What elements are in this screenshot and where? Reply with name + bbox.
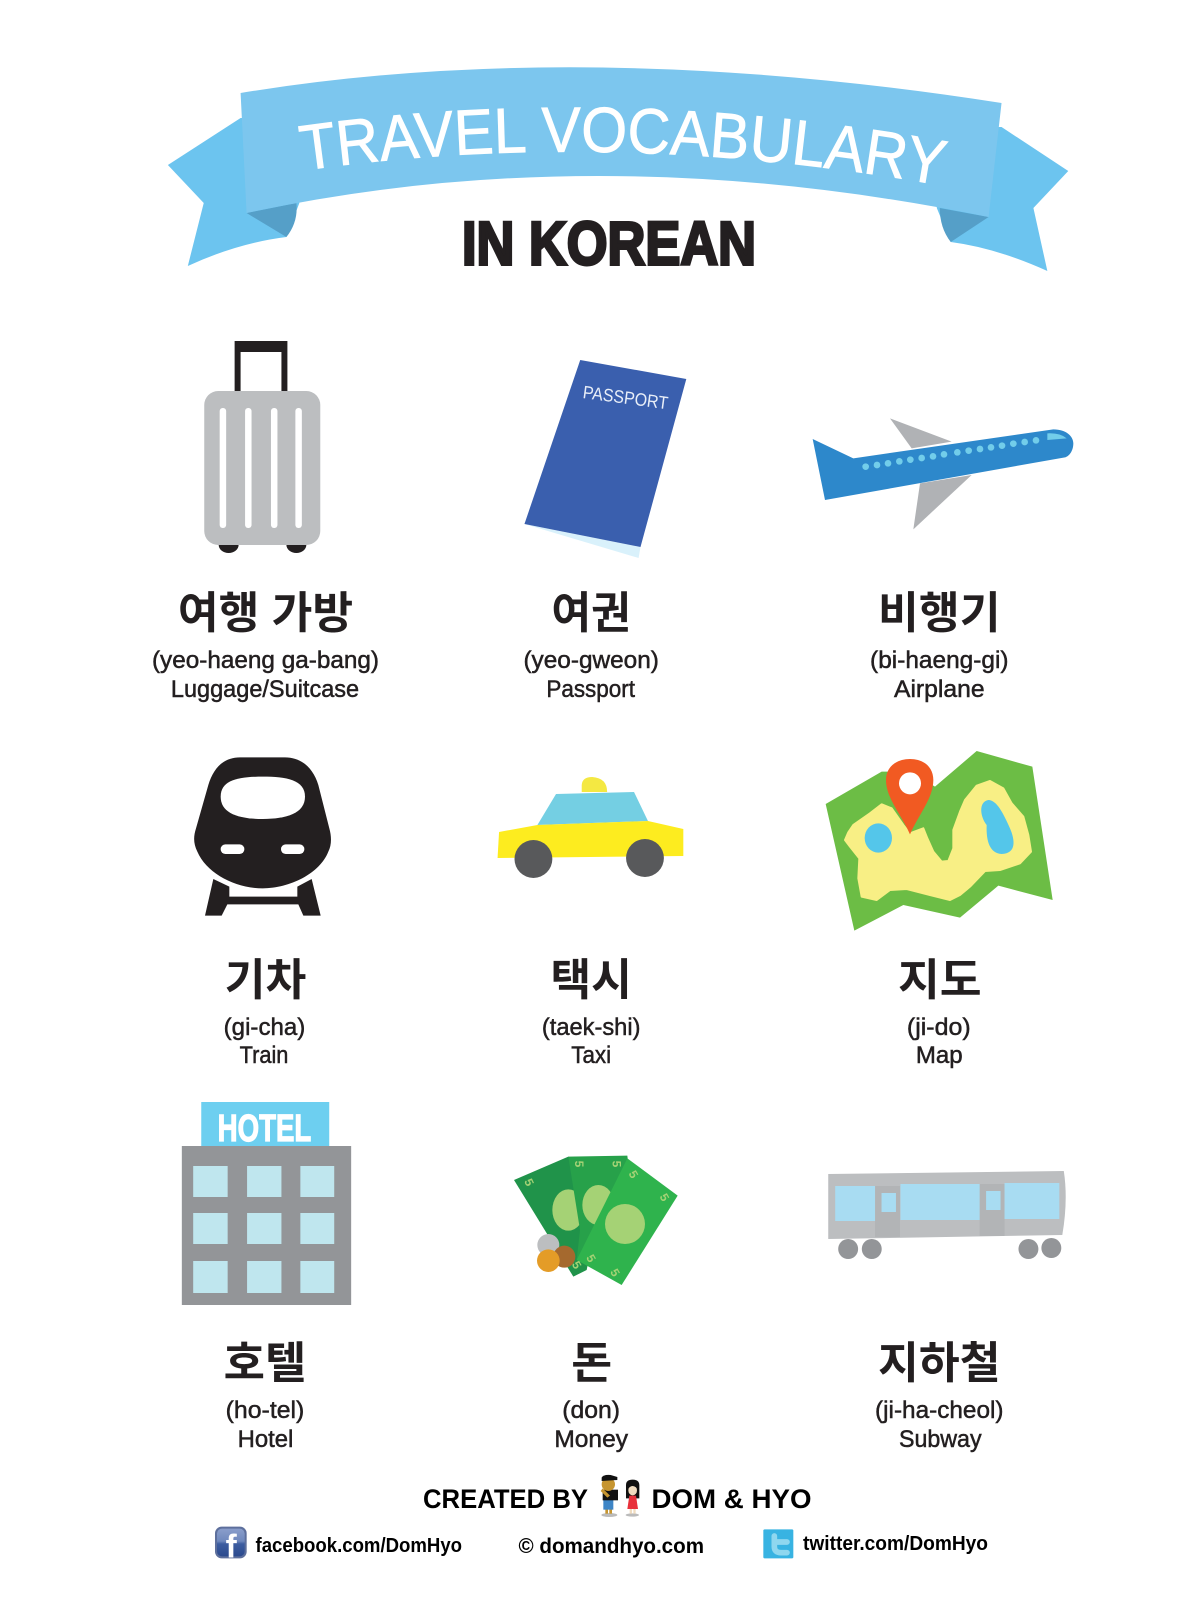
credit: created by: CREATED BY	[423, 1484, 588, 1514]
panel: passport	[523, 360, 686, 703]
banner ribbon	[168, 67, 1068, 271]
icon: money: 5	[572, 1161, 586, 1168]
label: map: 지도	[898, 956, 982, 1005]
label: luggage: 여행 가방	[178, 589, 353, 638]
icon: money: 5	[657, 1191, 672, 1204]
ribbon main band	[241, 67, 1002, 217]
panel: subway	[828, 1171, 1066, 1453]
label: train	[224, 956, 306, 1069]
label: train: 기차	[225, 956, 306, 1005]
label: luggage	[152, 589, 379, 703]
label: money: (don)	[562, 1397, 620, 1424]
label: subway: 지하철	[878, 1339, 1001, 1388]
label: subway	[875, 1339, 1004, 1453]
panel: money	[514, 1156, 678, 1453]
credit: dom and hyo: DOM & HYO	[652, 1484, 812, 1514]
label: passport: (yeo-gweon)	[523, 647, 659, 674]
ribbon right fold	[940, 208, 989, 242]
subtitle: in korean: IN KOREAN	[462, 210, 756, 278]
label: money: 돈	[571, 1339, 612, 1388]
icon: hotel: HOTEL	[218, 1108, 311, 1150]
icon: passport: PASSPORT	[582, 382, 669, 413]
label: hotel: (ho-tel)	[226, 1397, 304, 1424]
label: luggage: Luggage/Suitcase	[171, 676, 359, 703]
icon: taxi	[498, 777, 683, 878]
label: airplane: (bi-haeng-gi)	[870, 647, 1009, 674]
label: passport: Passport	[546, 676, 635, 703]
ribbon right tail	[937, 127, 1068, 271]
panel: airplane	[813, 418, 1073, 703]
label: map: Map	[916, 1042, 963, 1069]
label: subway: Subway	[899, 1426, 982, 1453]
icon: map	[826, 751, 1053, 931]
footer	[215, 1475, 988, 1565]
ribbon left tail	[168, 118, 299, 266]
icon: airplane	[813, 418, 1073, 529]
label: passport	[523, 589, 659, 703]
panel: taxi	[498, 777, 683, 1069]
icon: facebook	[215, 1527, 247, 1565]
icon: hotel	[182, 1102, 351, 1305]
label: taxi: 택시	[550, 956, 632, 1005]
icon: money: 5	[626, 1168, 641, 1181]
panel: hotel	[182, 1102, 351, 1453]
icon: passport	[524, 360, 686, 558]
label: map: (ji-do)	[907, 1014, 971, 1041]
label: map	[898, 956, 982, 1069]
icon: subway	[828, 1171, 1066, 1259]
label: airplane: 비행기	[878, 589, 1001, 638]
icon: twitter	[763, 1529, 793, 1558]
label: luggage: (yeo-haeng ga-bang)	[152, 647, 379, 674]
label: airplane: Airplane	[894, 676, 985, 703]
panel: map	[826, 751, 1053, 1069]
link: twitter: twitter.com/DomHyo	[803, 1533, 988, 1555]
icon: money: 5	[569, 1259, 585, 1272]
icon: hyo figure	[626, 1480, 639, 1517]
label: subway: (ji-ha-cheol)	[875, 1397, 1004, 1424]
label: hotel: Hotel	[238, 1426, 293, 1453]
icon: money: 5	[607, 1266, 623, 1279]
label: taxi	[542, 956, 640, 1069]
label: taxi: Taxi	[571, 1042, 611, 1069]
label: money	[554, 1339, 628, 1453]
label: money: Money	[554, 1426, 628, 1453]
icon: money: 5	[521, 1176, 537, 1189]
icon: money: 5	[610, 1161, 624, 1168]
label: train: Train	[240, 1042, 288, 1069]
label: train: (gi-cha)	[224, 1014, 305, 1041]
label: taxi: (taek-shi)	[542, 1014, 640, 1041]
ribbon left fold	[247, 203, 297, 237]
label: hotel	[224, 1339, 306, 1453]
label: passport: 여권	[551, 589, 631, 638]
icon: money: 5	[583, 1252, 599, 1265]
label: hotel: 호텔	[224, 1339, 306, 1388]
link: website: © domandhyo.com	[518, 1535, 704, 1558]
icon: facebook: f	[226, 1528, 238, 1565]
title: travel vocabulary: TRAVEL VOCABULARY	[298, 106, 949, 184]
icon: dom figure	[601, 1475, 618, 1517]
panel: luggage	[152, 341, 379, 703]
panel: train	[194, 757, 331, 1069]
icon: train	[194, 757, 331, 916]
label: airplane	[870, 589, 1009, 703]
link: facebook: facebook.com/DomHyo	[256, 1535, 462, 1557]
icon: suitcase	[204, 341, 320, 553]
icon: money	[514, 1156, 678, 1285]
